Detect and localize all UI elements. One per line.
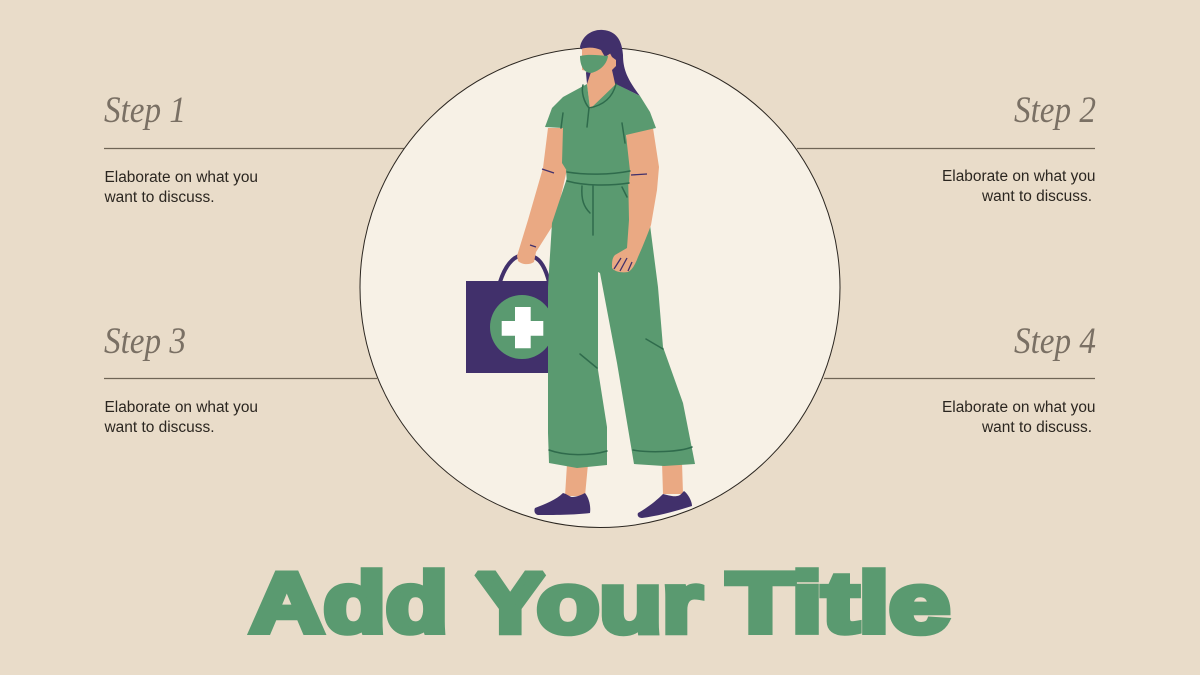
central circle [360, 48, 840, 528]
shoes [534, 491, 692, 518]
left arm and hand [517, 128, 568, 264]
step 1 text: want to discuss. [104, 189, 214, 206]
neck and face [582, 46, 616, 110]
right shoe [638, 491, 692, 518]
step 3 heading: Step 3 [104, 321, 186, 362]
step 1 heading: Step 1 [104, 90, 186, 131]
title: Title [727, 556, 950, 650]
right arm and hand [612, 128, 659, 272]
step 1 text: Elaborate on what you [104, 169, 258, 186]
illustration: healthcare worker [466, 30, 695, 518]
title: Add [250, 556, 448, 650]
title [250, 556, 950, 650]
panel: step 3 [104, 321, 258, 436]
title: Your [476, 556, 702, 650]
hair [580, 30, 640, 96]
panel: step 2 [942, 90, 1096, 205]
step 3 text: Elaborate on what you [104, 399, 258, 416]
step 4 text: want to discuss. [981, 419, 1092, 436]
step 2 heading: Step 2 [1014, 90, 1096, 131]
shirt [545, 84, 656, 171]
arm marks [530, 169, 647, 271]
step 1 text [104, 169, 258, 206]
connector lines [104, 148, 1095, 378]
step 3 text [104, 399, 258, 436]
icon: medical bag [466, 256, 554, 373]
step 2 text: want to discuss. [981, 188, 1092, 205]
trousers [548, 178, 695, 468]
fringe [580, 37, 611, 57]
panel: step 1 [104, 90, 258, 206]
step 4 heading: Step 4 [1014, 321, 1096, 362]
left shoe [534, 493, 590, 515]
step 4 text [942, 399, 1096, 436]
waist belt [566, 170, 630, 184]
panel: step 4 [942, 321, 1096, 436]
step 4 text: Elaborate on what you [942, 399, 1096, 416]
step 3 text: want to discuss. [104, 419, 214, 436]
step 2 text [942, 168, 1096, 205]
face mask [580, 55, 608, 73]
garment fold lines [549, 84, 692, 455]
legs [565, 462, 683, 496]
step 2 text: Elaborate on what you [942, 168, 1096, 185]
